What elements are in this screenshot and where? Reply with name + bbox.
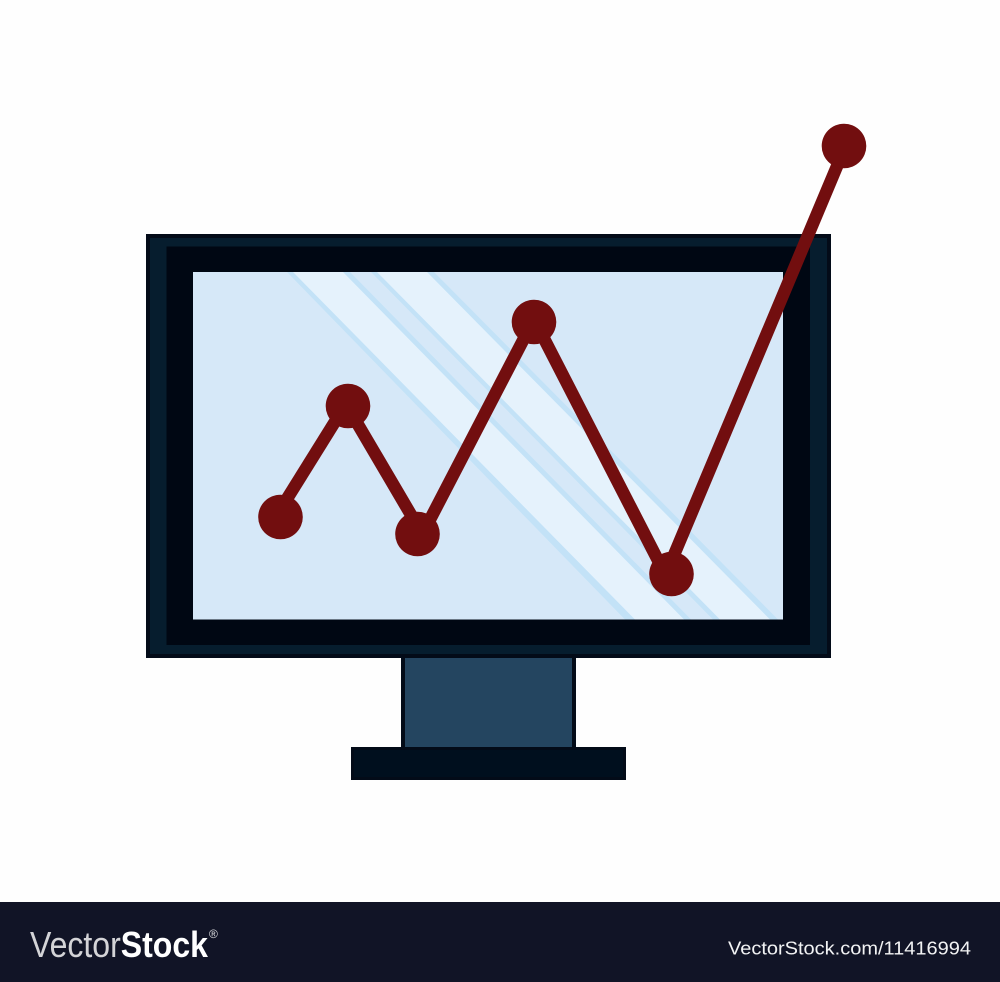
brand logo text: VectorStock bbox=[30, 924, 209, 965]
monitor stand neck bbox=[403, 656, 574, 749]
data point 4 bbox=[512, 300, 556, 344]
data point 2 bbox=[326, 384, 370, 428]
data point 6 bbox=[822, 124, 866, 168]
data point 5 bbox=[649, 552, 694, 596]
data point 3 bbox=[395, 512, 440, 556]
stock id text: VectorStock.com/11416994 bbox=[728, 938, 971, 958]
monitor outer frame bbox=[148, 236, 829, 656]
chart line bbox=[280, 146, 846, 574]
monitor screen bbox=[193, 272, 783, 620]
icon: computer monitor bbox=[148, 236, 829, 778]
monitor stand base bbox=[352, 748, 624, 778]
screen glare stripes bbox=[287, 272, 778, 620]
monitor inner bezel bbox=[166, 246, 810, 645]
line chart bbox=[258, 124, 866, 596]
data point 1 bbox=[258, 495, 303, 539]
registered mark: ® bbox=[209, 927, 218, 941]
footer bar bbox=[0, 902, 1000, 982]
